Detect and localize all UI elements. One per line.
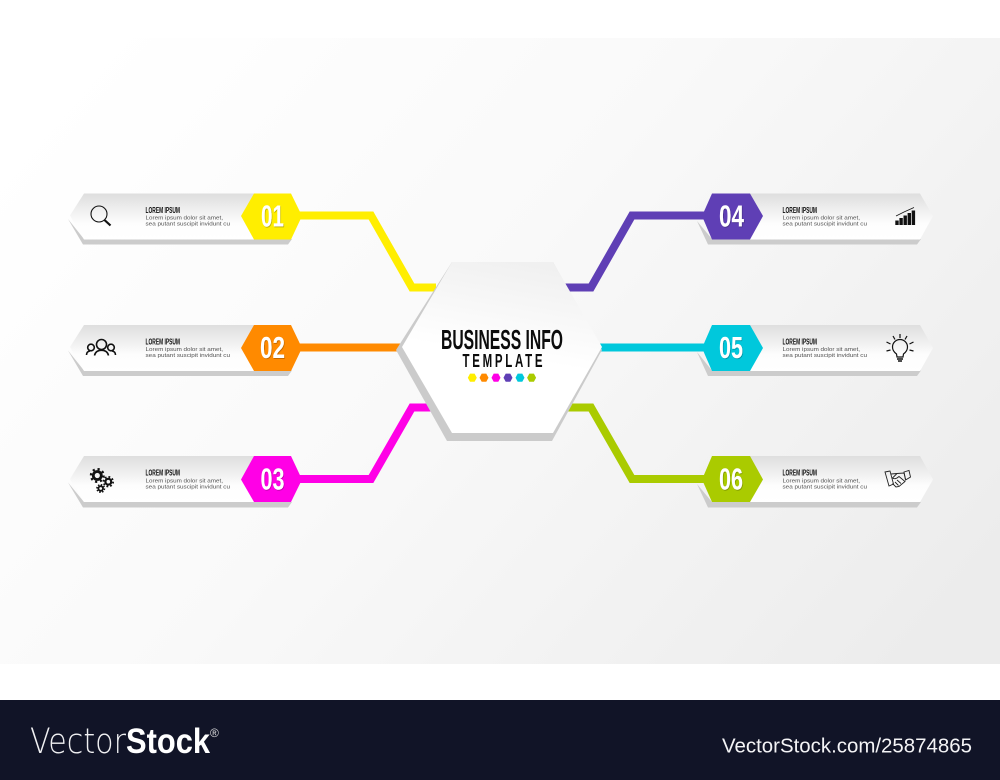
body text: Lorem ipsum dolor sit amet, bbox=[146, 216, 224, 222]
number 05: 05 bbox=[719, 330, 743, 365]
connector: 04 purple bbox=[565, 216, 705, 288]
number 03: 03 bbox=[260, 462, 284, 496]
body text: Lorem ipsum dolor sit amet, bbox=[782, 478, 861, 484]
heading: LOREM IPSUM bbox=[782, 468, 817, 478]
panel: central hexagon bbox=[396, 262, 602, 441]
number 02: 02 bbox=[260, 330, 285, 365]
icon: growth chart bbox=[895, 208, 915, 225]
logo: VectorStock bbox=[30, 722, 219, 762]
subtitle: template: TEMPLATE bbox=[462, 351, 545, 372]
connector: 02 orange bbox=[298, 344, 402, 352]
connector: 03 magenta bbox=[298, 408, 432, 479]
body text: sea putant suscipit invidunt cu bbox=[146, 353, 230, 359]
body text: sea putant suscipit invidunt cu bbox=[146, 222, 230, 228]
icon: gears bbox=[91, 469, 113, 492]
footer bar bbox=[0, 700, 1000, 780]
icon: light bulb bbox=[886, 334, 914, 361]
panel: step 06 bbox=[697, 456, 933, 508]
panel: step 03 bbox=[68, 456, 302, 508]
heading: LOREM IPSUM bbox=[146, 337, 180, 346]
body text: sea putant suscipit invidunt cu bbox=[146, 484, 230, 490]
body text: sea putant suscipit invidunt cu bbox=[782, 222, 867, 228]
body text: Lorem ipsum dolor sit amet, bbox=[782, 216, 861, 222]
number 04: 04 bbox=[719, 198, 745, 234]
colour dots bbox=[468, 374, 536, 382]
logo: VectorStock: Stock bbox=[126, 722, 210, 761]
connector: 01 yellow bbox=[298, 216, 436, 288]
title: business info: BUSINESS INFO bbox=[441, 324, 563, 355]
panel: step 05 bbox=[697, 325, 933, 376]
number 01: 01 bbox=[261, 198, 284, 234]
icon: people bbox=[86, 340, 116, 356]
connector: 06 lime bbox=[567, 408, 705, 479]
body text: Lorem ipsum dolor sit amet, bbox=[146, 478, 224, 484]
icon: magnifier bbox=[91, 206, 110, 226]
logo: VectorStock: ® bbox=[210, 726, 219, 740]
logo: VectorStock: Vector bbox=[30, 722, 127, 762]
panel: step 01 bbox=[68, 194, 302, 244]
connector: 05 cyan bbox=[599, 344, 705, 352]
image id: VectorStock.com/25874865 bbox=[722, 736, 972, 758]
icon: handshake bbox=[885, 470, 910, 487]
number 06: 06 bbox=[719, 462, 743, 496]
body text: sea putant suscipit invidunt cu bbox=[782, 353, 867, 359]
heading: LOREM IPSUM bbox=[782, 206, 817, 215]
heading: LOREM IPSUM bbox=[146, 468, 180, 478]
panel: step 02 bbox=[68, 325, 302, 376]
body text: sea putant suscipit invidunt cu bbox=[782, 484, 867, 490]
body text: Lorem ipsum dolor sit amet, bbox=[782, 347, 861, 353]
heading: LOREM IPSUM bbox=[782, 337, 817, 346]
body text: Lorem ipsum dolor sit amet, bbox=[146, 347, 224, 353]
heading: LOREM IPSUM bbox=[146, 206, 180, 215]
panel: step 04 bbox=[697, 194, 933, 244]
